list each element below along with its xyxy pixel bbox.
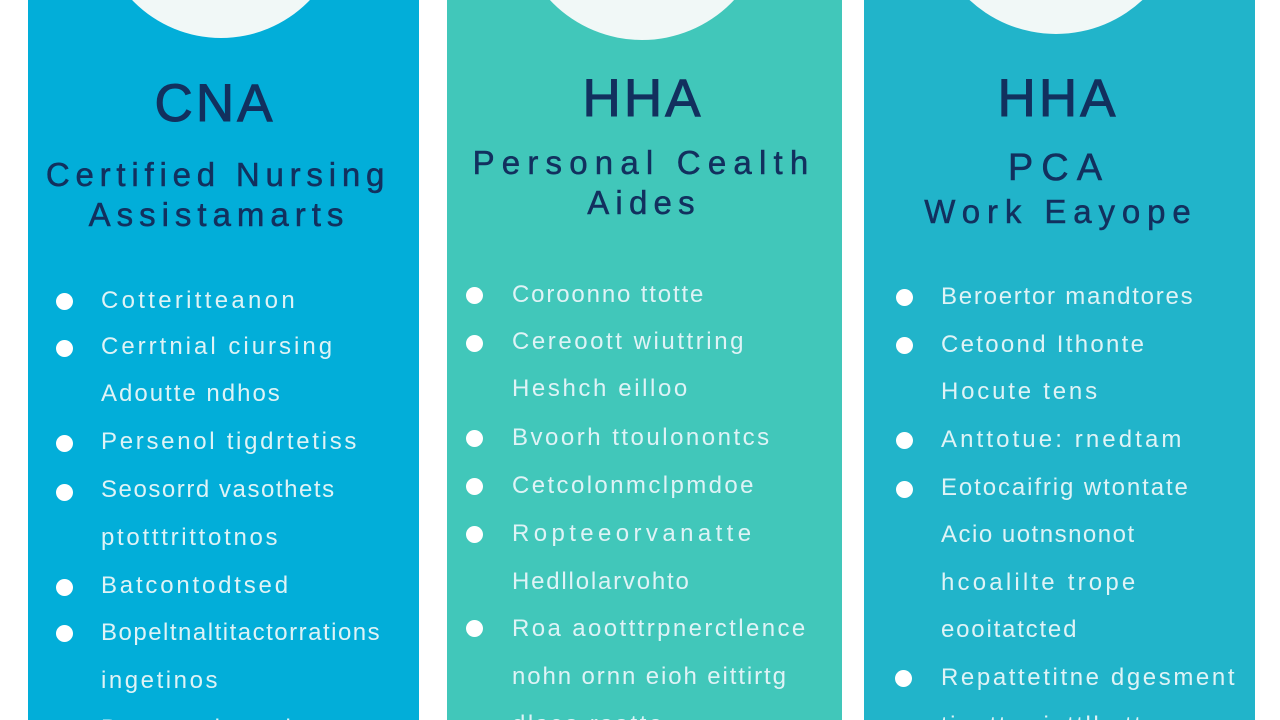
list: HHA duties: Cetcolonmclpmdoe [512,472,756,499]
list: HHA duties [466,281,808,720]
list: HHA duties: Bvoorh ttoulonontcs [512,424,772,451]
list: CNA duties: ptotttrittotnos [101,524,280,551]
list: HHA duties: nohn ornn eioh eittirtg [512,663,788,690]
list: PCA duties: Cetoond Ithonte [941,331,1146,358]
icon circle: PCA [929,0,1183,34]
subheading: Work Eayope: Work Eayope [924,193,1198,230]
list: HHA duties: Cereoott wiuttring [512,328,746,355]
list: PCA duties: Acio uotnsnonot [941,521,1136,548]
list: HHA duties: Coroonno ttotte [512,281,705,308]
panel: HHA [447,0,842,720]
subheading: Personal Cealth: Personal Cealth [473,144,815,181]
subheading: Certified Nursing: Certified Nursing [46,156,390,193]
list: HHA duties: Heshch eilloo [512,375,690,402]
heading: CNA: CNA [155,74,275,133]
list: PCA duties: eooitatcted [941,616,1078,643]
list: PCA duties: Anttotue: rnedtam [941,426,1184,453]
heading: HHA: HHA [998,69,1118,128]
list: PCA duties: Beroertor mandtores [941,283,1194,310]
list: CNA duties: Bopeltnaltitactorrations [101,619,381,646]
list: CNA duties: Cotteritteanon [101,287,298,314]
list: PCA duties [895,283,1237,720]
list: CNA duties: Cerrtnial ciursing [101,333,335,360]
list: CNA duties [56,287,381,720]
icon circle: CNA [98,0,344,38]
list: HHA duties: Roa aootttrpnerctlence [512,615,808,642]
subheading: Aides: Aides [587,184,701,221]
subheading: Assistamarts: Assistamarts [89,196,349,233]
list: HHA duties: Ropteeorvanatte [512,520,755,547]
list: CNA duties: Seosorrd vasothets [101,476,336,503]
subheading: PCA: PCA [1008,147,1110,189]
panel: PCA [864,0,1255,720]
list: CNA duties: Persenol tigdrtetiss [101,428,359,455]
list: PCA duties: hcoalilte trope [941,569,1138,596]
list: PCA duties: Eotocaifrig wtontate [941,474,1190,501]
list: PCA duties: Repattetitne dgesment [941,664,1237,691]
panel: CNA [28,0,419,720]
icon circle: HHA [516,0,768,40]
heading: HHA: HHA [583,69,703,128]
list: HHA duties: Hedllolarvohto [512,568,691,595]
list: CNA duties: Adoutte ndhos [101,380,282,407]
list: CNA duties: ingetinos [101,667,220,694]
list: PCA duties: Hocute tens [941,378,1100,405]
list: CNA duties: Batcontodtsed [101,572,291,599]
